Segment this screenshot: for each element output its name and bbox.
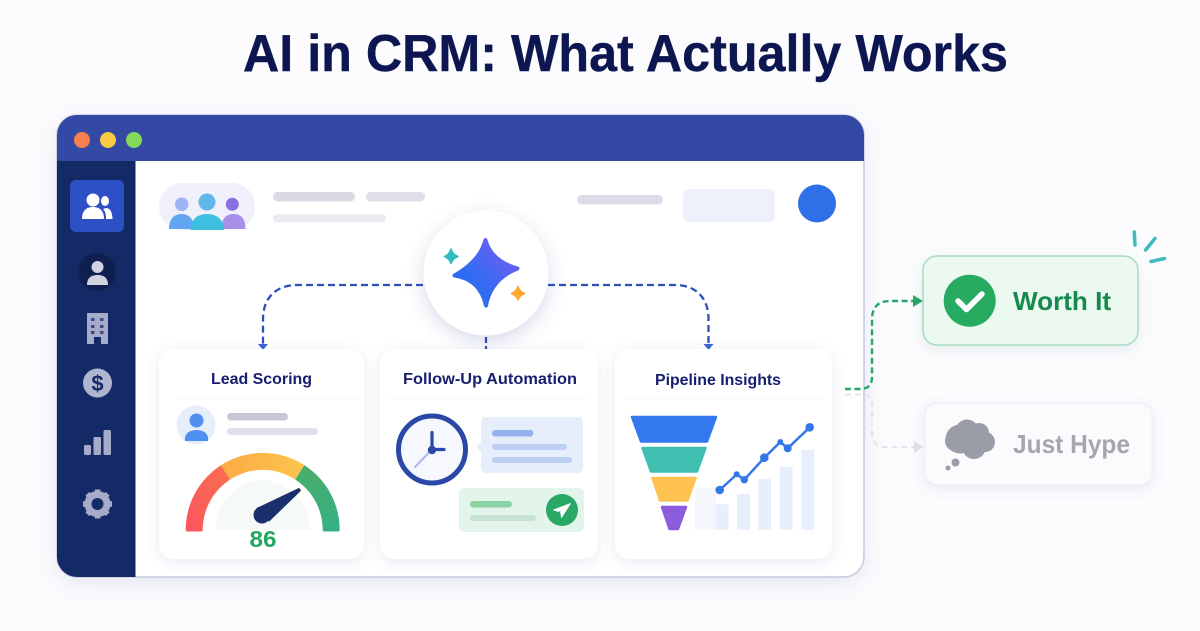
- gauge chart: [186, 453, 340, 552]
- header profile circle: [798, 184, 836, 222]
- icon: profile: [78, 253, 116, 291]
- panel: Worth It: [923, 256, 1138, 345]
- icon: active contacts tile: [70, 180, 124, 232]
- connector: AI to Lead Scoring: [258, 285, 423, 350]
- icon: check: [944, 275, 996, 327]
- gauge needle: [254, 488, 300, 524]
- message bubble: [476, 417, 583, 473]
- gauge value: 86: [250, 526, 276, 552]
- icon: dollar: $: [91, 371, 104, 396]
- connector: AI to Pipeline Insights: [548, 285, 714, 350]
- icon: building: [87, 313, 108, 344]
- window frame: [57, 115, 864, 577]
- panel: Pipeline Insights: [615, 349, 832, 559]
- team avatars pill: [159, 183, 255, 230]
- header search box: [683, 189, 775, 222]
- icon: lead avatar: [176, 406, 216, 444]
- heading: Lead Scoring: Lead Scoring: [211, 371, 312, 388]
- bar chart: [695, 450, 814, 530]
- icon: AI sparkle badge: [424, 210, 548, 336]
- trend line: [715, 423, 814, 494]
- label: Just Hype: Just Hype: [1013, 429, 1130, 459]
- panel: Follow-Up Automation: [380, 349, 598, 559]
- panel: Just Hype: [925, 403, 1152, 485]
- window control dots: [74, 132, 142, 148]
- panel: Lead Scoring: [159, 349, 364, 559]
- sidebar: [57, 161, 136, 577]
- heading: Follow-Up Automation: Follow-Up Automation: [403, 371, 577, 388]
- label: Worth It: Worth It: [1013, 286, 1111, 316]
- icon: gear: [83, 490, 112, 518]
- lead detail bars: [227, 413, 318, 435]
- icon: dollar: [83, 368, 112, 398]
- funnel chart: [632, 417, 716, 529]
- window title bar: [57, 115, 864, 161]
- arrow: to Just Hype: [845, 394, 923, 454]
- icon: highlight sparks: [1134, 232, 1164, 262]
- icon: bars: [84, 430, 111, 455]
- icon: thought cloud: [945, 420, 995, 470]
- header placeholder bars: [273, 192, 663, 222]
- sent message: [459, 488, 584, 532]
- heading: Pipeline Insights: Pipeline Insights: [655, 372, 781, 389]
- title: AI in CRM: What Actually Works: [243, 25, 1008, 83]
- icon: send: [546, 494, 578, 526]
- connector: AI to Follow-Up Automation: [485, 337, 487, 349]
- panel: CRM app window: [57, 115, 864, 577]
- arrow: to Worth It: [845, 295, 923, 389]
- icon: clock: [398, 416, 466, 483]
